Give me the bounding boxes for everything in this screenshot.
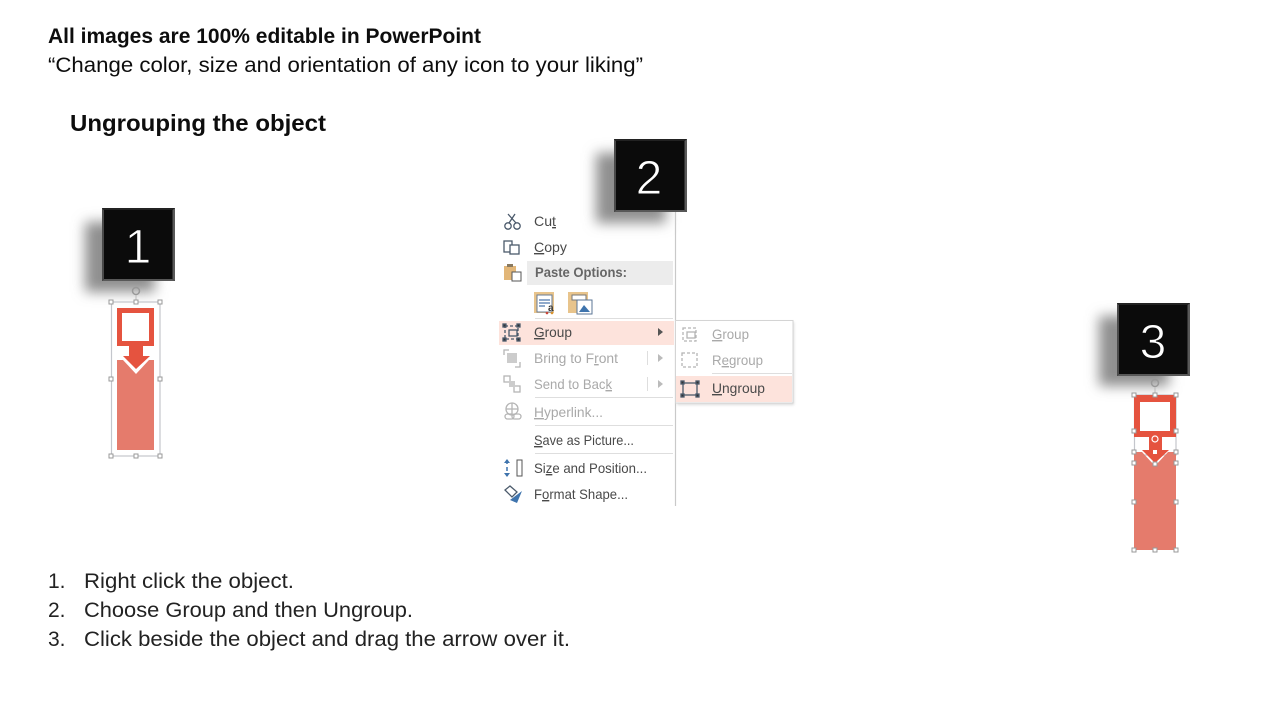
icon: paste keep text: a xyxy=(548,303,554,314)
menu labels: Size and Position... xyxy=(534,460,647,476)
instruction list: Choose Group and then Ungroup. xyxy=(84,599,413,622)
title: All images are 100% editable in PowerPoint xyxy=(48,24,481,48)
menu labels: Bring to Front xyxy=(534,350,618,366)
icon: scissors xyxy=(505,214,520,229)
number badge 3 xyxy=(1099,303,1190,386)
icon: paste picture xyxy=(568,292,592,314)
instruction list: 1. xyxy=(48,570,66,593)
submenu: Ungroup xyxy=(712,380,765,396)
icon: format shape xyxy=(505,486,522,503)
icon: paste xyxy=(504,264,521,281)
menu separators and arrows xyxy=(535,318,673,454)
icon: send to back xyxy=(504,376,520,392)
menu labels: Hyperlink... xyxy=(534,404,603,420)
selection handles xyxy=(1132,393,1178,552)
instruction list: 2. xyxy=(48,599,66,622)
number badge 2 shadow xyxy=(596,153,666,223)
menu divider line xyxy=(674,212,676,506)
menu labels: Paste Options: xyxy=(535,265,627,280)
selection frame xyxy=(109,288,162,458)
icon: size and position xyxy=(504,459,522,477)
paste options band xyxy=(527,261,673,285)
icon: hyperlink xyxy=(505,403,521,419)
submenu: Regroup xyxy=(712,352,763,368)
icon: group xyxy=(503,324,520,341)
panel: step 3 object xyxy=(1099,303,1190,552)
number badge 2: 2 xyxy=(636,152,662,205)
menu labels: Copy xyxy=(534,239,567,255)
menu labels: Save as Picture... xyxy=(534,432,634,448)
instruction list: 3. xyxy=(48,628,66,651)
icon: copy xyxy=(504,241,519,254)
heading: Ungrouping the object xyxy=(70,110,326,136)
icon: square with arrow and bar xyxy=(117,308,154,450)
number badge 3: 3 xyxy=(1140,316,1166,369)
submenu xyxy=(676,320,794,405)
menu labels xyxy=(534,213,647,502)
menu labels: Cut xyxy=(534,213,556,229)
number badge 1: 1 xyxy=(125,221,151,274)
icon: bring to front xyxy=(504,350,520,367)
menu labels: Format Shape... xyxy=(534,486,628,502)
icon: square with arrow over bar xyxy=(1134,380,1176,550)
instruction list: Click beside the object and drag the arrow over it. xyxy=(84,628,570,651)
group highlight xyxy=(499,321,674,345)
menu labels: Group xyxy=(534,324,572,340)
instruction list: Right click the object. xyxy=(84,570,294,593)
menu labels: Send to Back xyxy=(534,376,613,392)
instruction list xyxy=(48,570,570,651)
number badge 2 xyxy=(614,139,687,212)
panel: step 2 context menu xyxy=(499,139,794,506)
icon: paste keep text xyxy=(534,292,554,314)
number badge 1 xyxy=(85,208,175,292)
subtitle: “Change color, size and orientation of any icon to your liking” xyxy=(48,53,643,77)
submenu: Group xyxy=(712,326,749,342)
panel: step 1 object xyxy=(85,208,175,458)
